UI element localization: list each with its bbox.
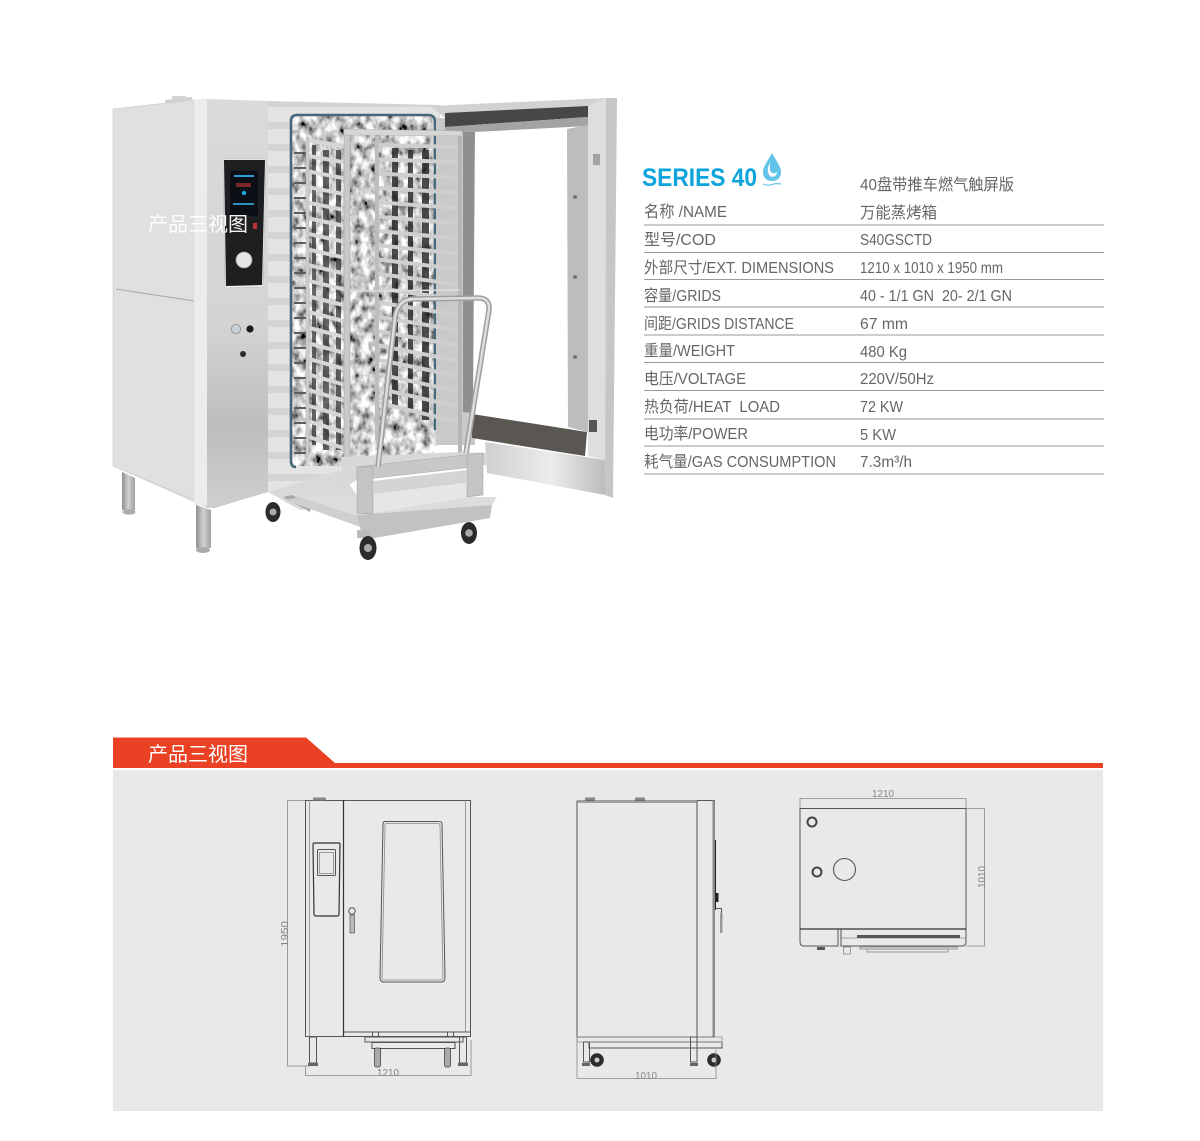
specification table (644, 175, 1104, 474)
oven interior wall (268, 101, 440, 492)
row: gas consumption: 耗气量/GAS CONSUMPTION (644, 453, 836, 471)
oven front column (207, 99, 268, 508)
series logo (642, 153, 781, 192)
trolley rack (294, 129, 462, 459)
row: code: S40GSCTD (860, 232, 932, 249)
panel: three views (113, 770, 1103, 1111)
row: heat load: 72 KW (860, 399, 904, 416)
side handle and panel (715, 840, 722, 933)
section heading (113, 738, 1103, 768)
control panel (223, 159, 266, 288)
row: power: 电功率/POWER (644, 425, 748, 443)
row: grids distance (644, 315, 908, 333)
door handle (349, 908, 355, 933)
depth dimension: 1010 (635, 1070, 657, 1082)
top depth dimension: 1010 (976, 866, 988, 888)
depth dimension (577, 1037, 716, 1082)
oven side panel (113, 96, 207, 508)
legs (122, 472, 211, 553)
trolley wheels (266, 502, 477, 560)
series title: SERIES 40 (642, 164, 757, 192)
top depth dimension (966, 808, 988, 946)
icon: water drop (763, 153, 781, 185)
section heading: 产品三视图 (148, 738, 248, 767)
row: heat load (644, 398, 904, 416)
row: voltage (644, 370, 934, 388)
row: name: 万能蒸烤箱 (860, 204, 937, 222)
row: power (644, 425, 897, 444)
product subtitle: 40盘带推车燃气触屏版 (860, 175, 1014, 194)
height dimension (279, 800, 310, 1066)
door window (380, 822, 445, 982)
flue outlets (808, 818, 856, 880)
side view drawing (577, 798, 722, 1082)
open door (430, 98, 617, 498)
width dimension: 1210 (377, 1067, 399, 1079)
control panel outline (313, 843, 340, 916)
row: weight (644, 342, 907, 361)
front view drawing (279, 798, 471, 1079)
top body outline (800, 808, 966, 954)
row: grids: 容量/GRIDS (644, 287, 721, 305)
dark reflections, right bay (392, 148, 429, 420)
trolley base (268, 452, 497, 540)
row: code: 型号/COD (644, 231, 716, 249)
row: name: 名称 /NAME (644, 203, 727, 221)
side trolley (577, 1037, 722, 1067)
height dimension: 1950 (279, 921, 291, 947)
row: dimensions: 1210 x 1010 x 1950 mm (860, 260, 1003, 277)
watermark caption: 产品三视图 (148, 208, 248, 237)
row: weight: 重量/WEIGHT (644, 342, 735, 360)
side body outline (577, 798, 715, 1038)
row: dimensions (644, 259, 1003, 277)
row: grids: 40 - 1/1 GN 20- 2/1 GN (860, 288, 1012, 305)
row: voltage: 220V/50Hz (860, 371, 934, 388)
top width dimension: 1210 (872, 788, 894, 800)
row: name (644, 203, 937, 222)
row: gas consumption: 7.3m³/h (860, 454, 912, 471)
row: dimensions: 外部尺寸/EXT. DIMENSIONS (644, 259, 834, 277)
row: weight: 480 Kg (860, 344, 907, 361)
row: grids distance: 67 mm (860, 316, 908, 333)
door seal (291, 115, 435, 467)
buttons (231, 324, 254, 357)
oven body outline (306, 798, 471, 1037)
top width dimension (800, 788, 966, 808)
row: grids distance: 间距/GRIDS DISTANCE (644, 315, 794, 333)
row: code (644, 231, 932, 249)
row: power: 5 KW (860, 427, 897, 444)
trolley handle (378, 298, 489, 467)
dark reflections, left bay (312, 145, 341, 450)
row: heat load: 热负荷/HEAT LOAD (644, 398, 780, 416)
chrome cavity (292, 116, 434, 466)
row: grids (644, 287, 1012, 305)
row: voltage: 电压/VOLTAGE (644, 370, 746, 388)
trolley and legs (308, 1032, 468, 1067)
width dimension (306, 1040, 471, 1079)
top view drawing (800, 788, 988, 954)
product photo: combi oven with trolley (113, 96, 617, 560)
